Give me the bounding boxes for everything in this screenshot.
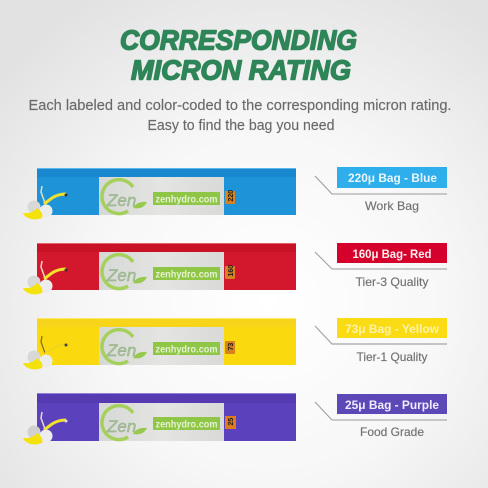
sewn label: red bag: Zen	[106, 266, 136, 285]
callout: red bag	[315, 243, 447, 289]
callout: yellow bag: Tier-1 Quality	[356, 350, 428, 364]
size tag: 160	[225, 265, 235, 279]
title: MICRON RATING	[131, 54, 351, 86]
callout: purple bag: Food Grade	[360, 425, 424, 439]
callout: yellow bag: 73μ Bag - Yellow	[345, 322, 440, 336]
icon: drawstring and toggle	[23, 336, 68, 370]
size tag: 160: 160	[228, 265, 235, 276]
title	[120, 24, 357, 86]
size tag: 73	[225, 341, 235, 354]
sewn label: yellow bag: zenhydro.com	[156, 344, 218, 356]
subtitle	[28, 98, 452, 134]
size tag: 220	[225, 190, 235, 204]
callout: yellow bag	[315, 318, 447, 364]
sewn label: purple bag	[99, 403, 224, 441]
subtitle: Each labeled and color-coded to the corresponding micron rating.	[28, 98, 452, 114]
title: CORRESPONDING	[120, 24, 357, 56]
sewn label: purple bag: zenhydro.com	[156, 420, 218, 430]
panel: blue bag	[23, 168, 296, 220]
callout: red bag: Tier-3 Quality	[356, 275, 428, 289]
callout: purple bag: 25μ Bag - Purple	[345, 398, 439, 412]
sewn label: purple bag: Zen	[106, 417, 136, 436]
callout: purple bag	[315, 394, 447, 439]
sewn label: yellow bag	[99, 327, 224, 365]
sewn label: yellow bag: Zen	[106, 341, 136, 360]
subtitle: Easy to find the bag you need	[148, 118, 334, 134]
size tag: 220: 220	[228, 190, 235, 202]
size tag: 25	[225, 416, 236, 429]
callout: blue bag	[315, 167, 447, 213]
callout: blue bag: 220μ Bag - Blue	[348, 171, 437, 185]
panel: yellow bag	[23, 318, 296, 370]
sewn label: red bag	[99, 252, 224, 290]
panel: red bag	[23, 243, 296, 294]
callout: blue bag: Work Bag	[365, 199, 419, 213]
icon: drawstring and toggle	[23, 412, 68, 444]
sewn label: blue bag	[99, 177, 224, 215]
size tag: 73: 73	[228, 343, 235, 350]
sewn label: blue bag: zenhydro.com	[156, 194, 218, 206]
callout: red bag: 160μ Bag- Red	[352, 247, 432, 261]
sewn label: blue bag: Zen	[106, 191, 136, 210]
size tag: 25: 25	[228, 418, 235, 426]
sewn label: red bag: zenhydro.com	[156, 270, 218, 280]
icon: drawstring and toggle	[23, 261, 68, 294]
panel: purple bag	[23, 393, 296, 444]
icon: drawstring and toggle	[23, 186, 68, 220]
